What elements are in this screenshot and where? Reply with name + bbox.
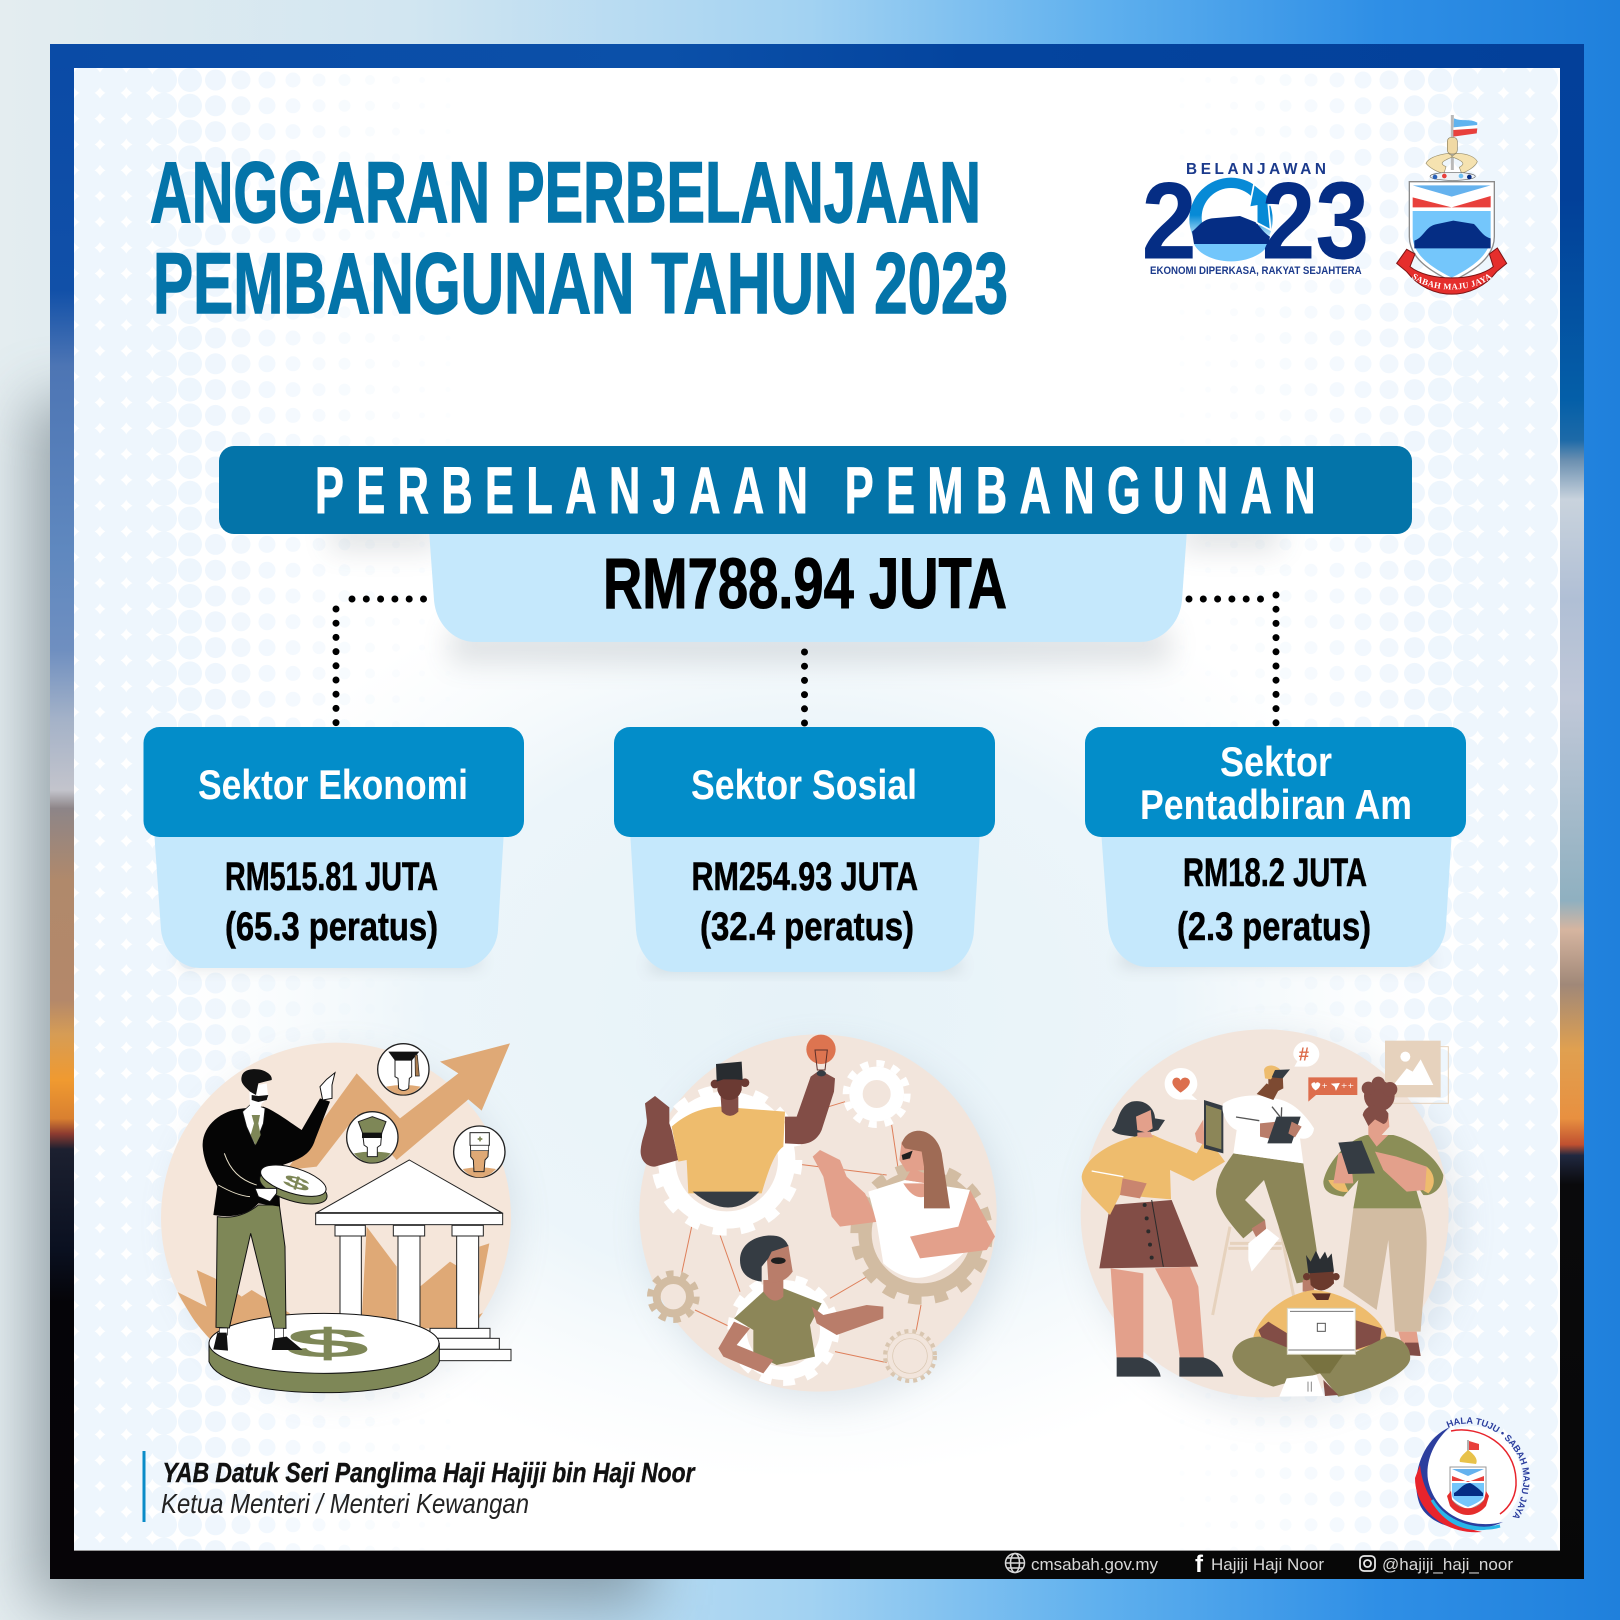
logo: Hala Tuju Sabah Maju Jaya	[1415, 1417, 1530, 1532]
panel: Sektor Ekonomi	[144, 727, 524, 968]
panel: Sektor Pentadbiran Am	[1085, 727, 1466, 967]
frame drop shadow	[30, 400, 650, 1605]
title: ANGGARAN PERBELANJAAN	[150, 145, 981, 241]
logo: Belanjawan 2023: 23	[1262, 160, 1369, 282]
connector: left	[336, 599, 428, 723]
panel: Sektor Sosial: Sektor Sosial	[691, 761, 917, 808]
panel: Sektor Sosial: (32.4 peratus)	[700, 905, 914, 949]
title	[150, 145, 1008, 332]
panel: Sektor Ekonomi: (65.3 peratus)	[225, 905, 438, 949]
footer bar: social links: @hajiji_haji_noor	[1382, 1555, 1513, 1574]
panel: Sektor Sosial: RM254.93 JUTA	[692, 855, 918, 899]
footer: attribution bar	[142, 1451, 146, 1522]
panel: Sektor Pentadbiran Am: (2.3 peratus)	[1177, 905, 1371, 949]
illustration: administration	[1081, 1029, 1449, 1397]
panel: Sektor Ekonomi: RM515.81 JUTA	[225, 855, 438, 899]
logo: Belanjawan 2023: EKONOMI DIPERKASA, RAKYAT SEJAHTERA	[1150, 265, 1362, 277]
panel: Sektor Sosial	[614, 727, 995, 972]
connector: right	[1189, 595, 1276, 723]
logo: Belanjawan 2023	[1142, 160, 1369, 282]
logo: Hala Tuju Sabah Maju Jaya: HALA TUJU • SABAH MAJU JAYA	[1446, 1417, 1530, 1518]
logo: Belanjawan 2023: 2	[1142, 160, 1197, 282]
footer: name and title: YAB Datuk Seri Panglima Haji Hajiji bin Haji Noor	[162, 1457, 696, 1488]
centre tint	[180, 540, 1420, 1480]
panel: Sektor Ekonomi: Sektor Ekonomi	[198, 761, 468, 808]
logo: Belanjawan 2023: BELANJAWAN	[1186, 161, 1326, 178]
title: PEMBANGUNAN TAHUN 2023	[153, 236, 1008, 332]
banner shadows	[330, 520, 1280, 663]
panel: Sektor Pentadbiran Am: Pentadbiran Am	[1140, 781, 1412, 828]
logo: Sabah coat of arms	[1396, 115, 1508, 295]
logo: Sabah coat of arms: SABAH MAJU JAYA	[1412, 274, 1492, 290]
illustration: economy	[161, 1043, 511, 1393]
panel: Sektor Pentadbiran Am: RM18.2 JUTA	[1183, 851, 1367, 895]
footer bar: social links	[74, 1550, 1560, 1578]
illustration: economy: $	[281, 1170, 313, 1196]
panel: Sektor Pentadbiran Am: Sektor	[1220, 738, 1332, 785]
footer bar: social links: f	[1195, 1551, 1204, 1578]
footer: name and title: Ketua Menteri / Menteri Kewangan	[161, 1488, 529, 1519]
panel: total value	[429, 530, 1187, 642]
illustration shadows	[175, 1040, 1460, 1410]
illustration: economy: $	[285, 1320, 370, 1366]
banner: Perbelanjaan Pembangunan	[219, 446, 1412, 534]
illustration: social	[639, 1034, 997, 1392]
footer: name and title	[161, 1457, 696, 1519]
footer bar: social links: cmsabah.gov.my	[1031, 1555, 1158, 1574]
connector: middle	[801, 652, 808, 723]
panel: total value: RM788.94 JUTA	[603, 545, 1007, 624]
illustration: administration: #	[1299, 1044, 1310, 1065]
footer bar: social links: Hajiji Haji Noor	[1211, 1555, 1324, 1574]
